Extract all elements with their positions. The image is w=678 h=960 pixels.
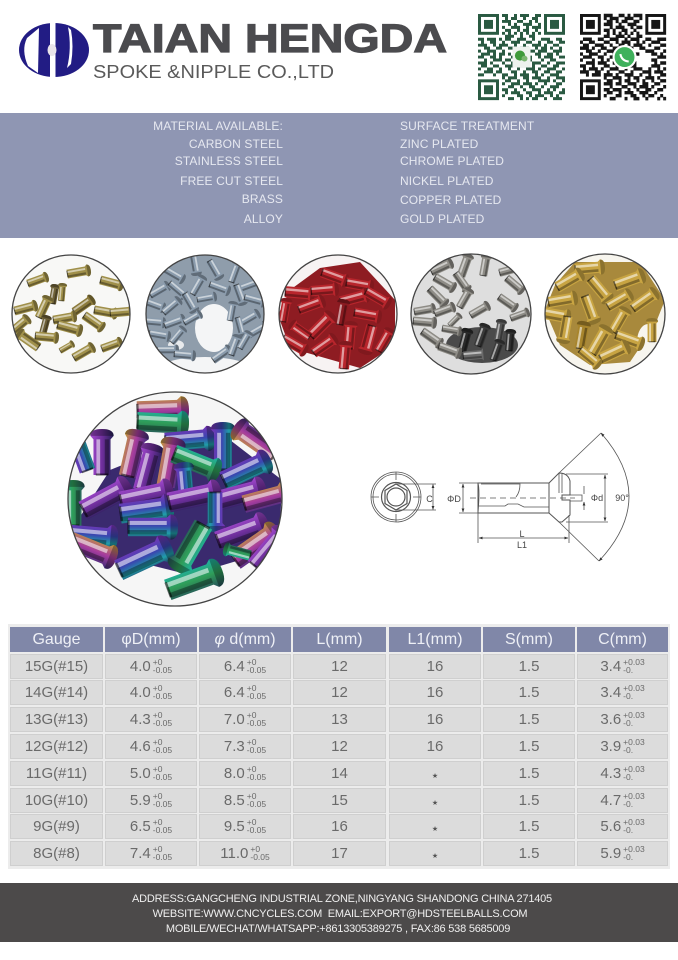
material: free cut steel: FREE CUT STEEL [180, 174, 283, 188]
row 8G: 1.5 [519, 845, 539, 862]
row 11G: -0.05 [247, 772, 266, 782]
row 12G: 3.9 [600, 738, 621, 755]
row 13G: 4.3 [130, 711, 151, 728]
row 10G: -0. [623, 799, 633, 809]
row 10G [10, 788, 668, 813]
row 8G: 5.9 [600, 845, 621, 862]
row 9G [10, 814, 668, 839]
row 10G: 4.7 [600, 792, 621, 808]
label C: C [426, 494, 433, 504]
row 11G: -0. [623, 772, 633, 782]
row 13G: 16 [427, 711, 443, 728]
title: TAIAN HENGDA [93, 17, 447, 61]
row 14G: 16 [427, 684, 443, 701]
table header row: S(mm) [505, 631, 553, 648]
row 8G: +0.03 [623, 844, 645, 854]
row 15G: 6.4 [224, 658, 245, 674]
footer contact band [0, 883, 678, 942]
row 14G: 4.0 [130, 684, 151, 701]
row 9G: 6.5 [130, 818, 151, 835]
table header row: L1(mm) [407, 631, 463, 648]
row 14G: -0.05 [153, 691, 172, 701]
row 11G: 4.3 [600, 765, 621, 782]
row 10G: -0.05 [247, 799, 266, 809]
table header row: Gauge [32, 631, 81, 648]
row 8G: +0 [153, 844, 162, 854]
row 13G: 7.0 [224, 711, 245, 728]
row 15G: +0 [247, 657, 256, 667]
row 14G: -0. [623, 691, 633, 701]
dimension labels: L [519, 529, 525, 539]
row 12G: -0. [623, 745, 633, 755]
QR code: WeChat [478, 15, 565, 99]
row 14G: 6.4 [224, 684, 245, 701]
row 10G: 8.5 [224, 792, 245, 808]
row 13G: +0.03 [623, 710, 645, 720]
row 14G: +0 [247, 683, 256, 693]
row 15G [10, 654, 668, 679]
surface treatment heading: SURFACE TREATMENT [400, 119, 534, 133]
row 13G: -0.05 [247, 718, 266, 728]
row 11G: ★ [432, 773, 438, 780]
row 8G: 11.0 [220, 845, 248, 862]
row 8G: ★ [432, 853, 438, 860]
materials heading: MATERIAL AVAILABLE: [153, 119, 283, 133]
treatment: chrome: CHROME PLATED [400, 154, 504, 168]
dimension labels: L1 [517, 540, 527, 550]
product photo: black-nickel nipples [411, 252, 531, 374]
row 9G: -0.05 [247, 825, 266, 835]
row 15G: +0 [153, 657, 162, 667]
treatment: copper: COPPER PLATED [400, 193, 501, 207]
treatment: nickel: NICKEL PLATED [400, 174, 494, 188]
row 13G: -0. [623, 718, 633, 728]
product photo: zinc-gold nipples [7, 255, 134, 373]
row 12G: 4.6 [130, 738, 151, 755]
row 15G: -0. [623, 665, 633, 675]
row 8G: +0 [250, 844, 260, 854]
address: ADDRESS:GANGCHENG INDUSTRIAL ZONE,NINGYANG SHANDONG CHINA 271405 [132, 893, 552, 905]
row 12G: +0.03 [623, 737, 645, 747]
row 10G: 10G(#10) [25, 792, 88, 808]
material: stainless steel: STAINLESS STEEL [175, 154, 283, 168]
row 12G: +0 [247, 737, 256, 747]
row 12G: 16 [427, 738, 443, 755]
row 10G: -0.05 [153, 799, 172, 809]
row 12G: +0 [153, 737, 162, 747]
treatment: gold: GOLD PLATED [400, 212, 484, 226]
row 12G: 12 [331, 738, 348, 755]
row 15G: -0.05 [153, 665, 172, 675]
row 13G: 13G(#13) [25, 711, 88, 728]
dimension labels: Φd [591, 493, 603, 503]
row 14G: +0.03 [623, 683, 645, 693]
row 12G: -0.05 [153, 745, 172, 755]
dimension labels: ΦD [447, 494, 461, 504]
row 10G: +0 [153, 791, 162, 801]
row 12G: 7.3 [224, 738, 245, 755]
table header row: φD(mm) [121, 631, 181, 648]
QR code: WhatsApp [580, 15, 666, 99]
material: brass: BRASS [242, 192, 283, 206]
row 9G: +0 [247, 817, 256, 827]
row 13G: -0.05 [153, 718, 172, 728]
row 11G: +0.03 [623, 764, 645, 774]
row 15G: 16 [427, 658, 443, 674]
material: carbon steel: CARBON STEEL [189, 137, 283, 151]
material: alloy: ALLOY [244, 212, 283, 226]
website and email: WEBSITE:WWW.CNCYCLES.COM EMAIL:EXPORT@HDSTEELBALLS.COM [153, 908, 527, 920]
row 13G: 1.5 [519, 711, 539, 728]
row 11G: +0 [153, 764, 162, 774]
row 9G: 9G(#9) [33, 818, 80, 835]
row 8G: -0. [623, 852, 633, 862]
row 14G: 1.5 [519, 684, 539, 701]
row 11G: -0.05 [153, 772, 172, 782]
row 10G: 15 [331, 792, 348, 808]
logo [19, 22, 89, 78]
row 12G: 1.5 [519, 738, 539, 755]
row 15G: -0.05 [247, 665, 266, 675]
row 14G: 12 [331, 684, 348, 701]
row 14G: 14G(#14) [25, 684, 88, 701]
row 15G: 3.4 [600, 658, 621, 674]
row 14G: +0 [153, 683, 162, 693]
row 13G: +0 [153, 710, 162, 720]
row 13G [10, 707, 668, 732]
table header row: φ d(mm) [214, 631, 276, 648]
row 9G: -0.05 [153, 825, 172, 835]
row 9G: +0.03 [623, 817, 645, 827]
row 15G: 4.0 [130, 658, 151, 674]
technical drawing of nipple [371, 433, 629, 561]
product photo: gold nipples [537, 254, 665, 374]
side view [447, 433, 629, 561]
row 11G: 8.0 [224, 765, 245, 782]
row 12G: -0.05 [247, 745, 266, 755]
dimension labels: 90° [615, 493, 629, 503]
row 10G: 5.9 [130, 792, 151, 808]
row 8G [10, 841, 668, 866]
row 9G: 1.5 [519, 818, 539, 835]
row 15G: +0.03 [623, 657, 645, 667]
front view [371, 472, 436, 522]
product photo: red nipples [277, 255, 397, 373]
row 15G: 15G(#15) [25, 658, 88, 674]
row 13G: 3.6 [600, 711, 621, 728]
row 13G: 13 [331, 711, 348, 728]
table header row: C(mm) [598, 631, 647, 648]
panel: specification table [8, 624, 670, 869]
row 10G: ★ [432, 800, 438, 806]
panel: materials and surface treatment band [0, 113, 678, 238]
row 10G: +0.03 [623, 791, 645, 801]
row 14G: -0.05 [247, 691, 266, 701]
row 11G: 14 [331, 765, 348, 782]
row 10G: 1.5 [519, 792, 539, 808]
row 11G: 1.5 [519, 765, 539, 782]
subtitle: SPOKE &NIPPLE CO.,LTD [93, 62, 334, 82]
row 9G: -0. [623, 825, 633, 835]
row 9G: 5.6 [600, 818, 621, 835]
product photo: rainbow nipples [61, 392, 295, 606]
row 10G: +0 [247, 791, 256, 801]
row 11G: 11G(#11) [26, 765, 87, 782]
row 12G [10, 734, 668, 759]
row 8G: 8G(#8) [33, 845, 80, 862]
row 8G: -0.05 [153, 852, 172, 862]
row 15G: 12 [331, 658, 348, 674]
treatment: zinc: ZINC PLATED [400, 137, 478, 151]
row 9G: +0 [153, 817, 162, 827]
row 8G: 17 [331, 845, 348, 862]
row 14G: 3.4 [600, 684, 621, 701]
row 11G [10, 761, 668, 786]
row 14G [10, 680, 668, 705]
phone and fax: MOBILE/WECHAT/WHATSAPP:+8613305389275 , FAX:86 538 5685009 [166, 923, 510, 935]
dimension labels [447, 493, 629, 550]
row 8G: 7.4 [130, 845, 151, 862]
row 13G: +0 [247, 710, 256, 720]
row 8G: -0.05 [250, 852, 270, 862]
product photo: blue-zinc nipples [145, 254, 265, 374]
row 12G: 12G(#12) [25, 738, 88, 755]
row 9G: 16 [331, 818, 348, 835]
row 9G: ★ [432, 826, 438, 833]
table header row: L(mm) [316, 631, 363, 648]
table header row [10, 627, 668, 652]
row 11G: +0 [247, 764, 256, 774]
row 9G: 9.5 [224, 818, 245, 835]
row 11G: 5.0 [130, 765, 151, 782]
row 15G: 1.5 [519, 658, 539, 674]
